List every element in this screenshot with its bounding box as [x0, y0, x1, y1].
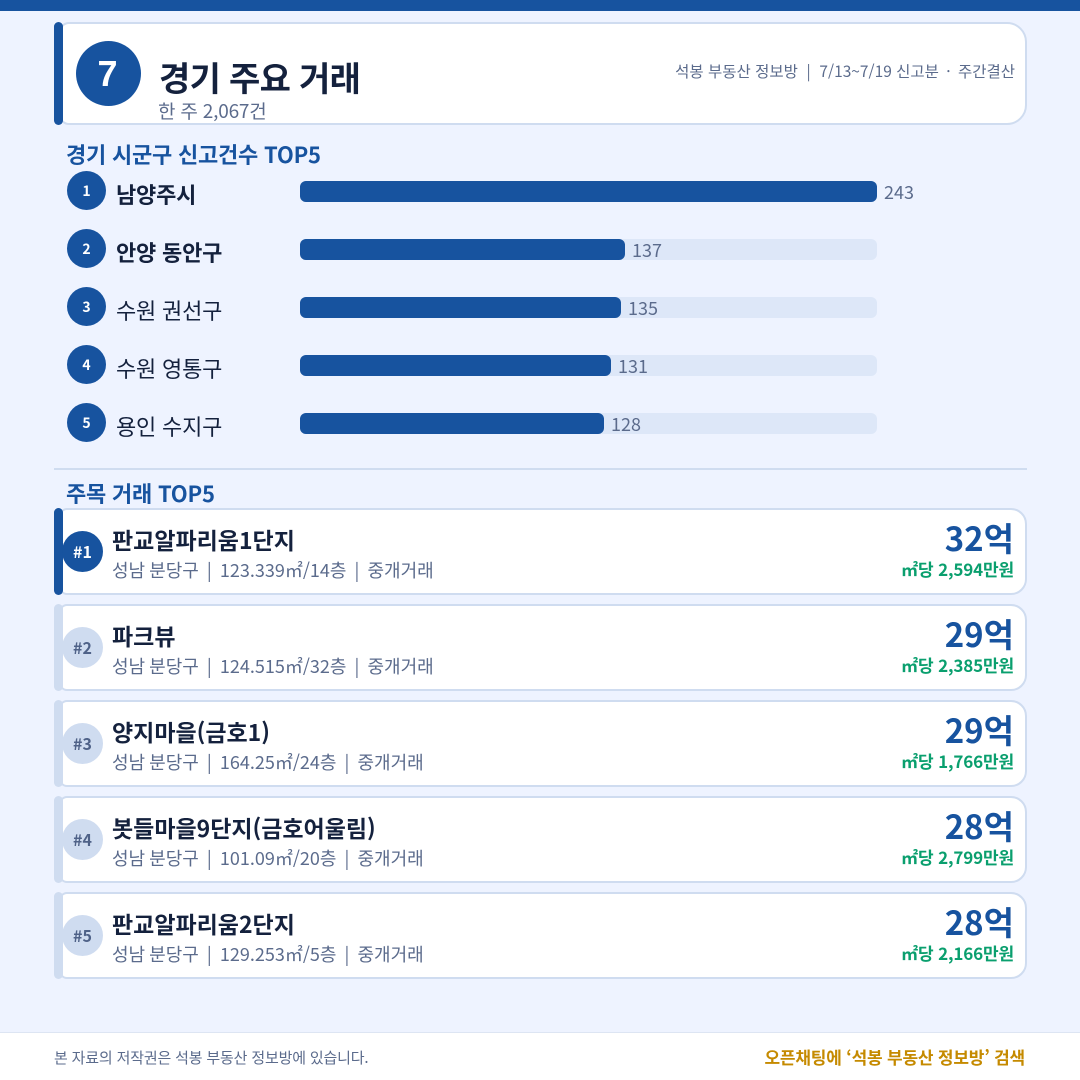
- deal card 5: 28억: [945, 897, 1014, 945]
- deal card 1: ㎡당 2,594만원: [901, 556, 1014, 581]
- row 4: [67, 345, 877, 384]
- deal card 4: ㎡당 2,799만원: [901, 844, 1014, 869]
- deal card 2: ㎡당 2,385만원: [901, 652, 1014, 677]
- heading: district top 5: 경기 시군구 신고건수 TOP5: [66, 138, 321, 170]
- footer: [0, 1032, 1080, 1080]
- deal card 4: 28억: [945, 801, 1014, 849]
- row 2: 137: [632, 237, 662, 263]
- deal card 3: #3: [73, 731, 92, 755]
- section number badge: [76, 41, 141, 106]
- deal card 1: #1: [73, 539, 92, 563]
- deal card 5: [54, 892, 1027, 979]
- deal card 1: 32억: [945, 513, 1014, 561]
- deal card 2: 파크뷰: [112, 618, 175, 652]
- deal card 3: 29억: [945, 705, 1014, 753]
- deal card 3: ㎡당 1,766만원: [901, 748, 1014, 773]
- section number badge: 7: [97, 53, 118, 94]
- deal card 2: 성남 분당구 | 124.515㎡/32층 | 중개거래: [112, 653, 434, 679]
- bar chart: district reports: [67, 171, 914, 442]
- row 2: 안양 동안구: [116, 236, 222, 268]
- row 1: 243: [884, 179, 914, 205]
- row 3: 수원 권선구: [116, 294, 222, 326]
- title: 경기 주요 거래: [159, 52, 360, 101]
- row 5: [67, 403, 877, 442]
- deal card 1: 판교알파리움1단지: [112, 522, 295, 556]
- deal card 5: 판교알파리움2단지: [112, 906, 295, 940]
- row 5: 용인 수지구: [116, 410, 222, 442]
- source and period: 석봉 부동산 정보방 | 7/13~7/19 신고분 · 주간결산: [675, 60, 1015, 82]
- deal card 4: #4: [73, 827, 92, 851]
- row 2: [67, 229, 877, 268]
- row 1: 1: [82, 181, 91, 201]
- deal card 1: [54, 508, 1027, 595]
- deal card 4: 봇들마을9단지(금호어울림): [112, 810, 376, 844]
- deal card 2: 29억: [945, 609, 1014, 657]
- deal card 4: 성남 분당구 | 101.09㎡/20층 | 중개거래: [112, 845, 424, 871]
- header card background: [59, 22, 1027, 125]
- call to action: 오픈채팅에 ‘석봉 부동산 정보방’ 검색: [764, 1044, 1025, 1069]
- heading: top deals: 주목 거래 TOP5: [66, 477, 215, 509]
- deal card 3: [54, 700, 1027, 787]
- deal card 5: #5: [73, 923, 92, 947]
- deal card 1: 성남 분당구 | 123.339㎡/14층 | 중개거래: [112, 557, 434, 583]
- row 3: 135: [628, 295, 658, 321]
- row 2: 2: [82, 239, 91, 259]
- row 4: 수원 영통구: [116, 352, 222, 384]
- weekly total: 한 주 2,067건: [158, 97, 267, 124]
- deal card 4: [54, 796, 1027, 883]
- copyright: 본 자료의 저작권은 석봉 부동산 정보방에 있습니다.: [54, 1047, 368, 1068]
- deal card 2: #2: [73, 635, 92, 659]
- top bar: [0, 0, 1080, 11]
- deal card 5: 성남 분당구 | 129.253㎡/5층 | 중개거래: [112, 941, 424, 967]
- deal card 2: [54, 604, 1027, 691]
- row 1: 남양주시: [116, 178, 196, 210]
- row 5: 5: [82, 413, 91, 433]
- header panel: [54, 22, 1027, 125]
- row 5: 128: [611, 411, 641, 437]
- row 3: [67, 287, 877, 326]
- row 4: 4: [82, 355, 91, 375]
- deal card 5: ㎡당 2,166만원: [901, 940, 1014, 965]
- row 4: 131: [618, 353, 648, 379]
- header accent bar: [54, 22, 63, 125]
- deal card 3: 성남 분당구 | 164.25㎡/24층 | 중개거래: [112, 749, 424, 775]
- deal card 3: 양지마을(금호1): [112, 714, 270, 748]
- row 1: [67, 171, 914, 210]
- row 3: 3: [82, 297, 91, 317]
